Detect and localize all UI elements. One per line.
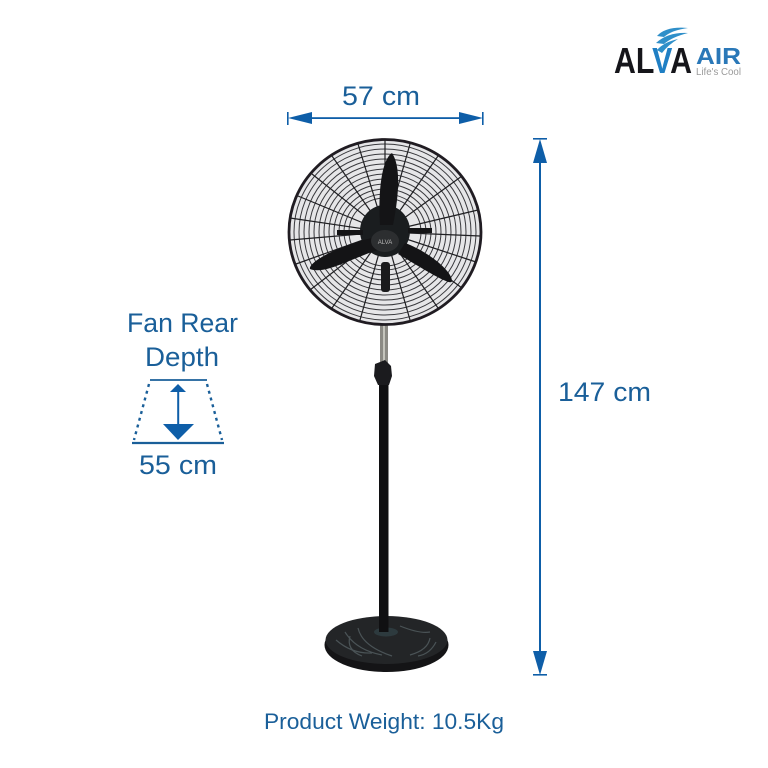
width arrow (287, 112, 484, 125)
depth trapezoid icon (132, 380, 224, 443)
depth heading line 2: Depth (145, 342, 219, 372)
product weight: Product Weight: 10.5Kg (264, 709, 504, 734)
logo AIR: AIR (696, 43, 741, 69)
fan blades (310, 153, 452, 282)
logo tagline: Life's Cool (696, 67, 741, 78)
pole (374, 322, 392, 632)
height dimension (533, 138, 651, 676)
depth heading: Fan Rear (127, 308, 238, 338)
rear depth dimension (127, 308, 238, 480)
logo (614, 28, 741, 81)
fan product photo (289, 140, 481, 672)
logo swoosh (656, 28, 688, 53)
fan guard (289, 140, 481, 324)
width label: 57 cm (342, 81, 420, 111)
fan base (324, 616, 448, 672)
logo wordmark: ALVA (614, 40, 692, 81)
width dimension (287, 81, 484, 125)
depth value: 55 cm (139, 450, 217, 480)
height arrow (533, 138, 547, 676)
fan hub (360, 205, 410, 257)
fan motor mount (381, 262, 390, 292)
height label: 147 cm (558, 377, 651, 407)
hub badge: ALVA (378, 240, 392, 246)
hub badge (371, 230, 399, 252)
